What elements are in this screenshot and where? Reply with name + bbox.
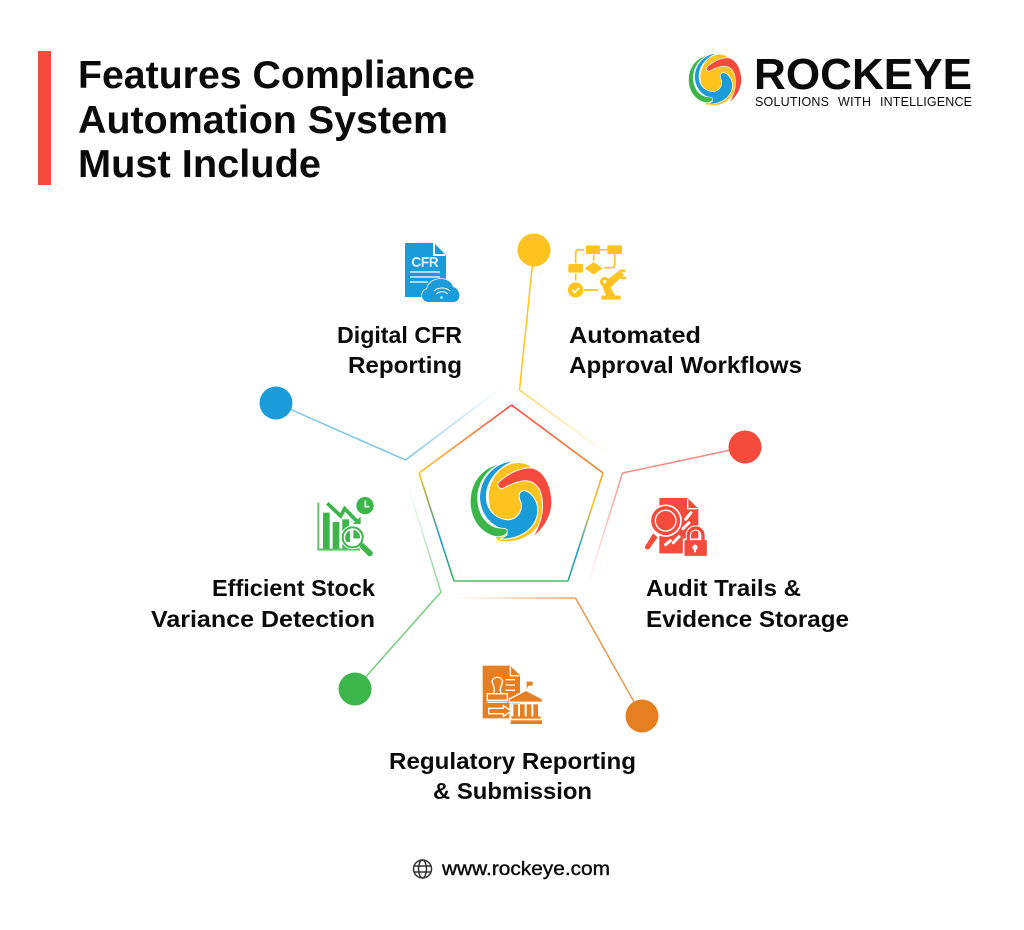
label: digital CFR reporting [337,322,462,378]
website url: www.rockeye.com [441,858,610,880]
central swirl logo [471,462,551,541]
icon: stock variance chart [317,497,374,556]
label: audit trails and evidence storage [646,575,849,632]
tagline: WITH [838,95,871,109]
accent bar [38,51,51,185]
label: audit trails and evidence storage: Audit Trails & [646,575,801,601]
logo: Rockeye [689,50,972,109]
title: Features Compliance [78,54,475,97]
tagline: INTELLIGENCE [880,95,972,109]
connector: regulatory reporting [453,598,658,732]
label: digital CFR reporting: Reporting [348,352,462,378]
label: automated approval workflows: Approval Workflows [569,352,802,378]
label: digital CFR reporting: Digital CFR [337,322,462,348]
connector: audit trails [587,430,762,587]
central pentagon [419,405,603,581]
icon: CFR document with cloud [405,243,459,302]
label: regulatory reporting and submission: Regulatory Reporting [389,748,636,774]
brand name: ROCKEYE [754,50,972,99]
label: automated approval workflows: Automated [569,322,701,348]
label: audit trails and evidence storage: Evidence Storage [646,606,849,632]
label: efficient stock variance detection: Efficient Stock [212,575,375,601]
label: efficient stock variance detection: Variance Detection [151,606,375,632]
title: Automation System [78,99,448,142]
tagline [755,95,972,109]
label: automated approval workflows [569,322,802,378]
title: Must Include [78,143,321,186]
icon: globe [414,860,432,878]
tagline: SOLUTIONS [755,95,829,109]
connector: automated approval workflows [518,234,610,456]
title [78,54,475,186]
icon: audit magnifier and lock [644,498,708,557]
icon: CFR document with cloud: CFR [412,254,438,270]
label: regulatory reporting and submission [389,748,636,804]
label: regulatory reporting and submission: & Submission [433,778,592,804]
logo mark [689,54,741,106]
connector: stock variance detection [338,483,441,706]
label: efficient stock variance detection [151,575,375,632]
icon: approval workflow [568,245,626,300]
connector: digital CFR reporting [260,386,501,460]
icon: regulatory stamp and bank [483,666,543,724]
